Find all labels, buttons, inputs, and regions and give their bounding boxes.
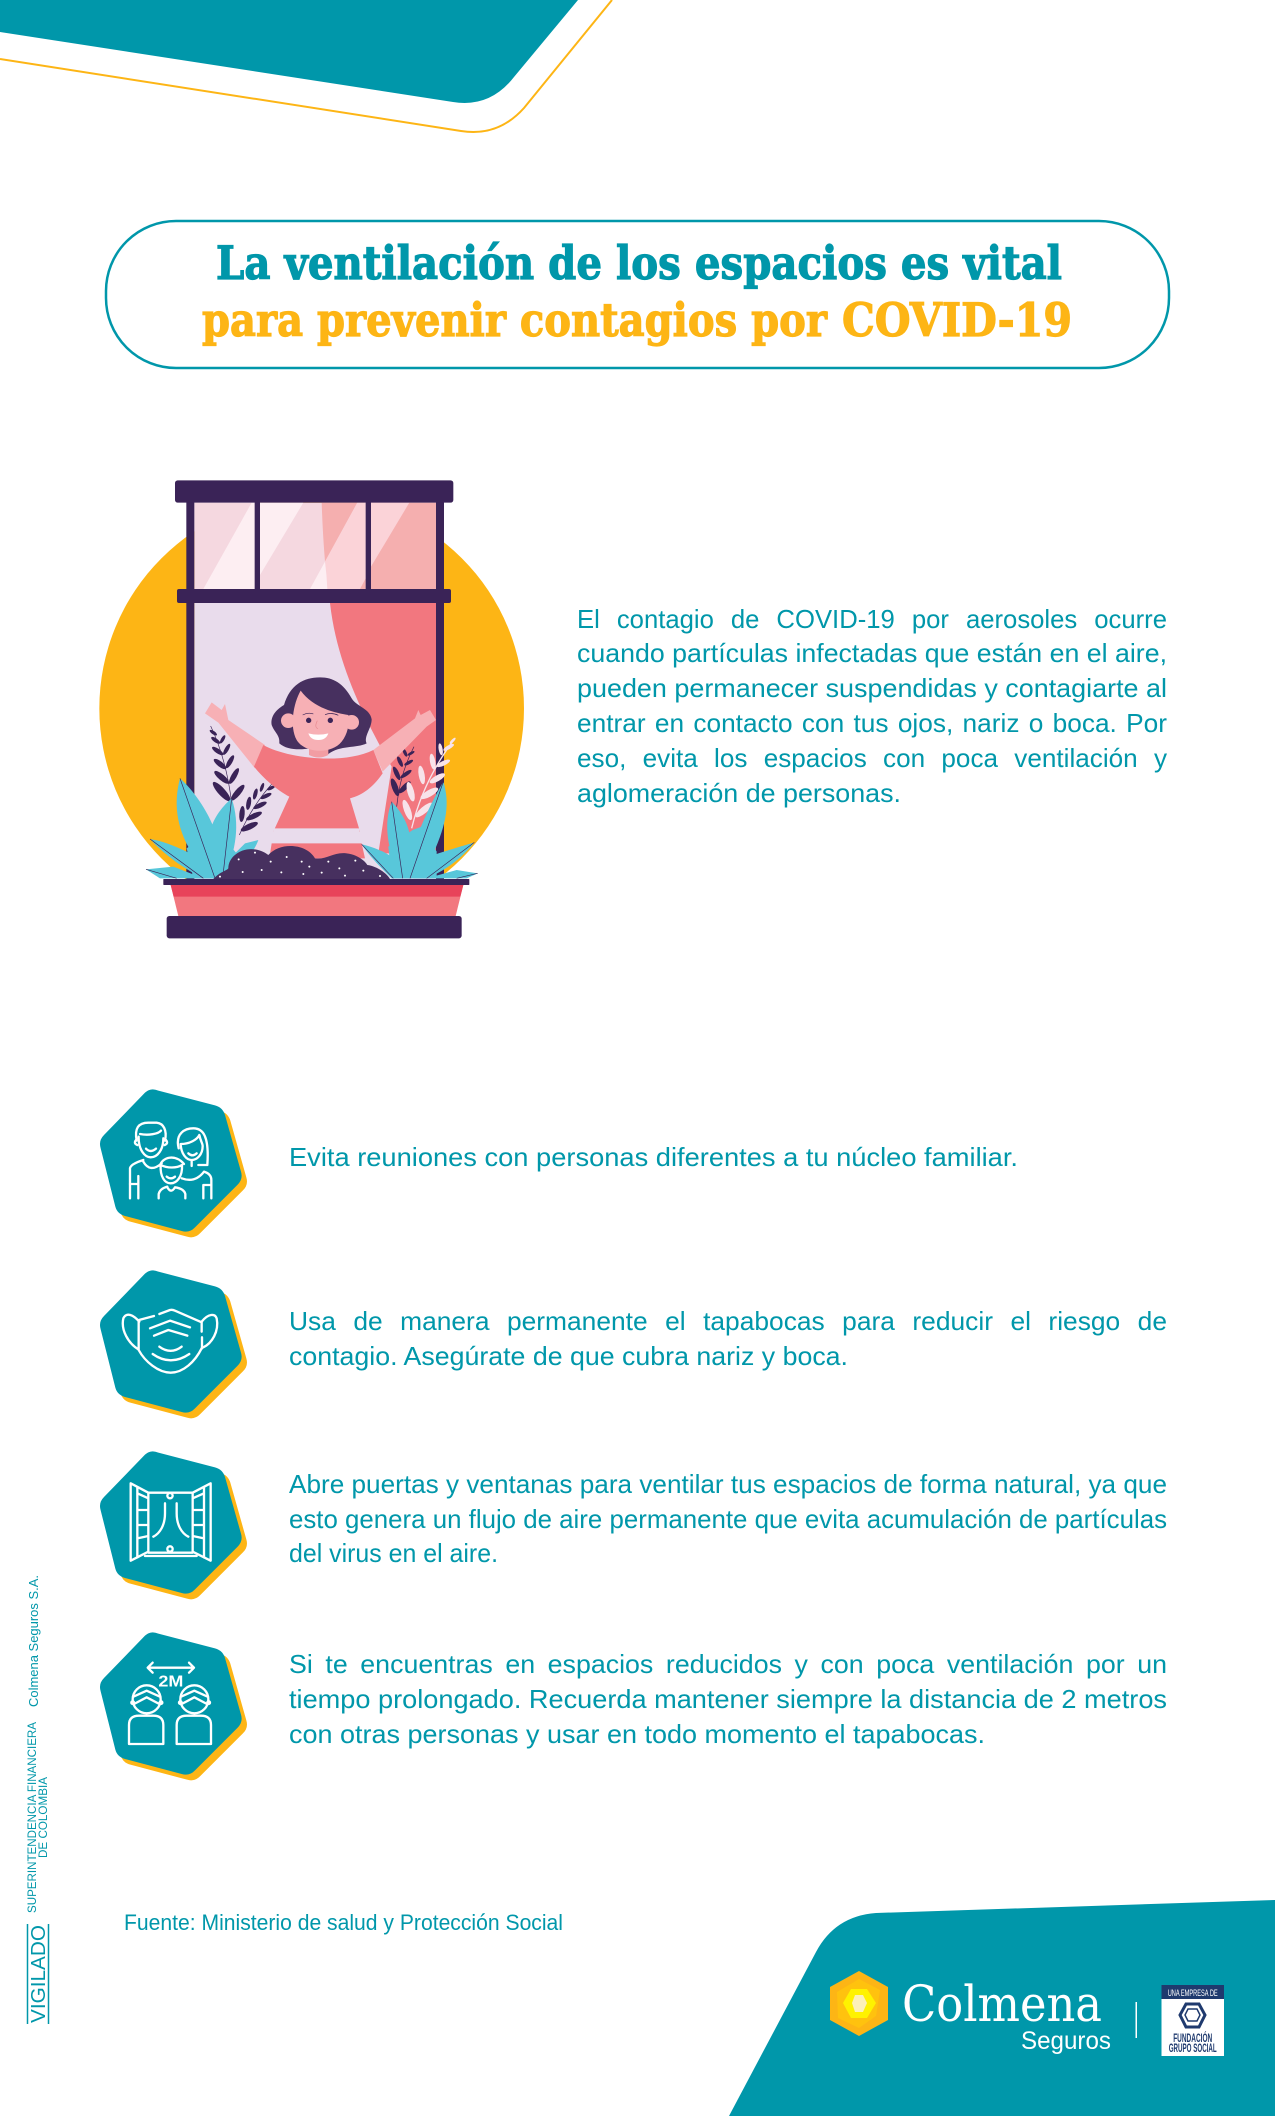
teal leaves left (146, 778, 258, 878)
logo: Fundación Grupo Social (1162, 1985, 1224, 2056)
intro paragraph: pueden permanecer suspendidas y contagiarte al (577, 673, 1167, 703)
logo: hexagon (830, 1971, 888, 2036)
curtain (330, 603, 436, 853)
bush (213, 846, 390, 879)
intro paragraph (577, 604, 1167, 808)
vigilado vertical legal text: DE COLOMBIA (36, 1777, 50, 1858)
intro paragraph: cuando partículas infectadas que están en el aire, (577, 638, 1167, 668)
icon: distance hexagon (100, 1632, 247, 1780)
fern centre left (239, 781, 276, 835)
intro paragraph: aglomeración de personas. (577, 778, 901, 808)
vigilado vertical legal text: SUPERINTENDENCIA FINANCIERA (25, 1722, 39, 1913)
illustration: girl at window (99, 480, 524, 938)
logo divider (1136, 2002, 1137, 2038)
ears (281, 713, 296, 728)
intro paragraph: El contagio de COVID-19 por aerosoles ocurre (577, 604, 1167, 634)
ventilate text: Abre puertas y ventanas para ventilar tus espacios de forma natural, ya que (289, 1469, 1167, 1499)
distance text (289, 1649, 1167, 1749)
header teal shape (0, 0, 578, 103)
logo: Colmena wordmark: Colmena (902, 1975, 1102, 2033)
intro paragraph: entrar en contacto con tus ojos, nariz o boca. Por (577, 708, 1167, 738)
source: Fuente: Ministerio de salud y Protección Social (124, 1910, 563, 1935)
window glass lower (194, 603, 436, 883)
distance text: con otras personas y usar en todo momento el tapabocas. (289, 1719, 985, 1749)
yellow circle (99, 496, 524, 921)
vigilado vertical legal text: VIGILADO (28, 1925, 50, 2023)
window frame (175, 480, 453, 883)
mouth (308, 733, 328, 740)
distance text: tiempo prolongado. Recuerda mantener siempre la distancia de 2 metros (289, 1684, 1167, 1714)
distance text: Si te encuentras en espacios reducidos y con poca ventilación por un (289, 1649, 1167, 1679)
footer teal shape (729, 1900, 1275, 2116)
header yellow line (0, 0, 612, 132)
eyes (306, 718, 311, 723)
logo: Fundación Grupo Social: FUNDACIÓN (1173, 2030, 1212, 2045)
reduce gatherings text: Evita reuniones con personas diferentes a tu núcleo familiar. (289, 1142, 1018, 1172)
ventilate text: esto genera un flujo de aire permanente que evita acumulación de partículas (289, 1504, 1167, 1534)
face (293, 691, 349, 751)
logo: Fundación Grupo Social: UNA EMPRESA DE (1168, 1988, 1218, 1998)
title line 2: para prevenir contagios por (202, 293, 828, 347)
title line 1: La ventilación de los espacios es vital (216, 236, 1062, 290)
intro paragraph: eso, evita los espacios con poca ventilación y (577, 743, 1167, 773)
vigilado vertical legal text (25, 1575, 50, 2024)
mask text: Usa de manera permanente el tapabocas para reducir el riesgo de (289, 1306, 1167, 1336)
neck (309, 748, 328, 757)
logo: Fundación Grupo Social: GRUPO SOCIAL (1169, 2041, 1217, 2055)
arms (205, 702, 265, 768)
hair (271, 677, 372, 754)
logo: Seguros: Seguros (1021, 2027, 1111, 2055)
icon: family hexagon (100, 1089, 247, 1237)
teal leaves right (362, 782, 478, 878)
icon: window hexagon (100, 1451, 247, 1599)
shirt (254, 745, 383, 832)
girl (205, 677, 436, 858)
title covid: COVID-19 (842, 293, 1072, 347)
mask text: contagio. Asegúrate de que cubra nariz y boca. (289, 1341, 848, 1371)
mask text (289, 1306, 1167, 1371)
icon: mask hexagon (100, 1270, 247, 1418)
planter (163, 879, 469, 938)
fern left (209, 726, 246, 804)
title pill (106, 221, 1169, 368)
distance label: 2M (158, 1673, 183, 1690)
window glass upper (194, 503, 436, 589)
ventilate text (289, 1469, 1167, 1568)
vigilado vertical legal text: Colmena Seguros S.A. (26, 1575, 41, 1707)
fern white (401, 737, 456, 828)
fern centre right (389, 747, 415, 807)
ventilate text: del virus en el aire. (289, 1538, 498, 1568)
shirt band (272, 828, 361, 843)
